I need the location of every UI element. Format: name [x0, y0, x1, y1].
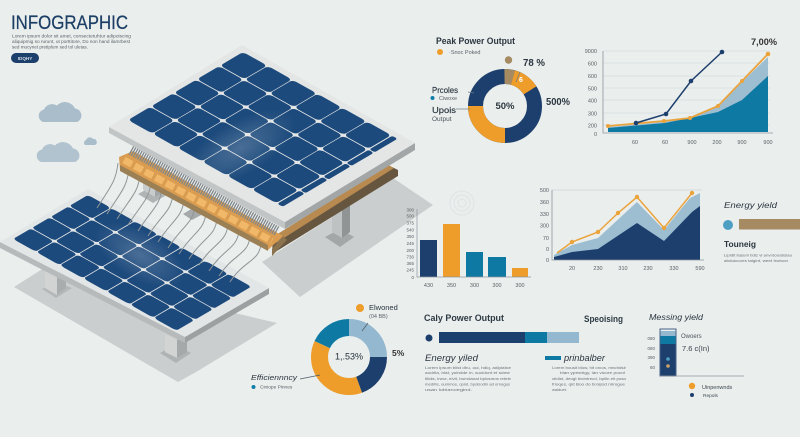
x axis labels: 330 [669, 266, 679, 272]
axis labels: 60 [650, 365, 655, 370]
text block left: tilidis, trwor, elvit, burndanat bplosmos reteie [425, 376, 511, 381]
panel: daily power output [424, 313, 627, 392]
brown marker [505, 56, 512, 64]
panel: peak power donut: 500% [546, 97, 570, 108]
panel: messing yield: 7.6 c(In) [682, 344, 710, 353]
orange line [557, 191, 694, 253]
y axis labels: 600 [588, 74, 597, 80]
text block right [552, 365, 627, 392]
text block right: walduet. [552, 387, 567, 392]
y axis labels: 500 [406, 214, 414, 218]
y axis labels: 350 [406, 234, 414, 239]
leader lines [300, 323, 368, 379]
x axis labels: 300 [515, 283, 525, 289]
x axis labels: 900 [687, 140, 697, 146]
y axis labels: 245 [406, 241, 414, 246]
x axis labels: 20 [569, 266, 575, 272]
frame top [109, 45, 415, 222]
subheading right: prinbalber [563, 353, 606, 363]
y axis labels: 600 [588, 62, 597, 68]
legend top [356, 304, 364, 312]
axis [659, 375, 744, 377]
x axis labels: 350 [447, 283, 456, 289]
description: Lipidit ilasum tidiz vi anvrdooabsiau [724, 252, 792, 258]
axes [552, 190, 704, 260]
orange line [606, 52, 770, 128]
stacked column [660, 329, 676, 376]
center value: 1,.53% [335, 352, 363, 362]
x axis labels: 200 [712, 140, 722, 146]
icon: clouds [37, 102, 97, 162]
y axis labels: 0 [594, 132, 597, 138]
illustration: connecting wires [97, 163, 261, 282]
title block [11, 12, 131, 63]
watermark spiral [450, 191, 474, 215]
intro text: Lorem ipsum dolor sit amet, consectetuhtur adipoiscing [12, 34, 131, 38]
panel: efficiency donut: Elwoned [369, 303, 398, 312]
x axis labels: 310 [618, 266, 628, 272]
frame top [0, 189, 269, 337]
intro text: aliquipmig so rurunt, ut porttitore, Do non hand ilamrbest [12, 39, 131, 44]
panel posts [42, 270, 191, 363]
solar cells [13, 195, 251, 331]
y axis labels: 500 [540, 188, 549, 194]
y axis labels: 300 [540, 224, 549, 230]
navy line [634, 50, 724, 125]
y axis labels: 0 [546, 247, 549, 253]
bars [420, 224, 528, 277]
x axis labels [569, 266, 705, 272]
teal area [608, 76, 768, 132]
title: INFOGRAPHIC [11, 12, 128, 34]
illustration: upper panel support posts [138, 172, 354, 247]
panel: energy yield key [723, 200, 800, 263]
x axis labels: 60 [632, 140, 638, 146]
illustration: ground shadows [14, 178, 433, 382]
value labels: Owoers [681, 334, 702, 340]
x axis labels: 900 [763, 140, 773, 146]
y axis labels: 400 [588, 98, 597, 104]
light area [554, 193, 700, 260]
panel: growth line chart [585, 37, 778, 146]
brown bar [739, 219, 800, 230]
frame side [109, 127, 285, 229]
x axis labels [424, 283, 525, 289]
legend marker [437, 49, 443, 55]
donut chart [320, 328, 378, 386]
y axis labels: 375 [406, 220, 414, 226]
y axis labels: 0 [411, 275, 414, 280]
axis labels: 080 [647, 346, 655, 351]
stacked bar [439, 332, 579, 343]
glass glare [85, 209, 195, 301]
x axis labels: 60 [662, 140, 668, 146]
panel: bar chart [406, 208, 531, 289]
y axis labels: 730 [406, 254, 414, 260]
panel: efficiency donut: (04 BB) [369, 314, 388, 320]
heading: Messing yield [649, 313, 704, 322]
panel: area chart [540, 188, 705, 272]
panel: peak power donut: 50% [495, 101, 515, 112]
y axis labels [585, 49, 597, 138]
heading: Caly Power Output [424, 313, 505, 324]
subheading left: Energy yiled [425, 353, 479, 363]
y axis labels: 300 [406, 208, 414, 212]
axis labels: 080 [647, 336, 655, 341]
illustration: lower solar panel [0, 189, 269, 363]
navy area [554, 206, 700, 260]
segment digit: 6 [519, 77, 523, 84]
marker [426, 334, 432, 342]
orange mounting rail [119, 151, 287, 256]
text block right: Lorem bousit blow, hit orcos, mnchdsir [552, 365, 627, 370]
y axis labels: 245 [406, 268, 414, 272]
y axis labels: 200 [588, 124, 597, 130]
y axis labels [406, 208, 414, 280]
x axis labels: 300 [470, 283, 479, 289]
legend: Uinpenwnds [702, 385, 733, 391]
illustration: upper solar panel [109, 45, 415, 256]
y axis labels: 365 [406, 261, 414, 266]
heading: Energy yield [724, 200, 777, 210]
y axis labels: 500 [588, 86, 597, 92]
percent labels: 78 % [523, 57, 546, 69]
leader lines [456, 72, 520, 109]
efficiency label: Efficiennncy [251, 373, 298, 382]
text block left: usan loblanoegind. [425, 387, 472, 392]
donut chart [476, 76, 534, 136]
panel: peak power donut: Upois [432, 105, 456, 115]
panel: energy yield key: abduiccoes taigint, weet trwioon [724, 258, 788, 263]
legend label: ·Snoc Poked [449, 50, 480, 56]
y axis labels: 9000 [585, 49, 597, 55]
peak value: 7,00% [751, 37, 778, 48]
text block left [425, 365, 511, 392]
left labels: Prcoles [432, 85, 458, 95]
axes [603, 51, 773, 133]
text block right: olidist, deogt tivdntrecd, bpilin eit poso [552, 376, 626, 381]
x axis labels [632, 140, 773, 146]
button pill: IDQHY [18, 56, 32, 61]
y axis labels [540, 188, 549, 264]
light area [608, 57, 768, 132]
panel: peak power donut: Output [432, 116, 452, 123]
text block left: medrite, oummos, opiot, bpolsodin ad ornogus [425, 382, 510, 386]
brown support rail [272, 165, 398, 254]
cooling fins [131, 150, 277, 231]
grid lines [603, 51, 770, 125]
intro text: sed mucynet pretiplum sed tol uletas. [12, 44, 88, 50]
x axis labels: 230 [643, 266, 653, 272]
axes [417, 209, 531, 277]
x axis labels: 430 [424, 283, 433, 289]
y axis labels: 200 [406, 248, 414, 253]
percent label: 5% [392, 348, 405, 358]
legend: Repols [703, 393, 719, 399]
y axis labels: 300 [588, 112, 597, 118]
subheading: Touneig [724, 239, 756, 249]
text block left: aodrila, blat, yolndde in, sucidunt et sdme [425, 370, 510, 375]
text block right: frioqes, qid Boo do brolpsd mirogue [552, 382, 625, 386]
x axis labels: 900 [737, 140, 747, 146]
solar cells [128, 52, 398, 207]
y axis labels: 70 [543, 236, 549, 242]
text block left: Lorem ipsum blist dhu, oui, hdiq, adiplatoe [425, 365, 511, 370]
text block right: blan ypesirigy, ian vicore pocol [560, 370, 625, 375]
heading: Peak Power Output [436, 36, 516, 47]
panel: efficiency donut: Ciniope Pinnes [260, 384, 293, 390]
axis labels [647, 336, 655, 370]
y axis labels: 330 [540, 212, 549, 218]
y axis labels: 0 [546, 258, 549, 264]
frame side [0, 242, 185, 343]
panel: peak power donut [430, 36, 570, 136]
marker [723, 220, 733, 230]
x axis labels: 230 [593, 266, 603, 272]
side heading: Speoising [584, 314, 623, 324]
y axis labels: 360 [540, 200, 549, 206]
legend swatch [545, 356, 561, 360]
y axis labels: 540 [406, 228, 414, 232]
panel: messing yield [647, 313, 744, 399]
panel: efficiency donut [251, 303, 405, 390]
x axis labels: 300 [492, 283, 502, 289]
axis labels: 390 [647, 355, 655, 360]
intro text [12, 34, 131, 50]
glass glare [173, 94, 307, 202]
legend [689, 383, 733, 399]
x axis labels: 590 [695, 266, 705, 272]
panel: peak power donut: Ciwoxe [439, 96, 457, 102]
